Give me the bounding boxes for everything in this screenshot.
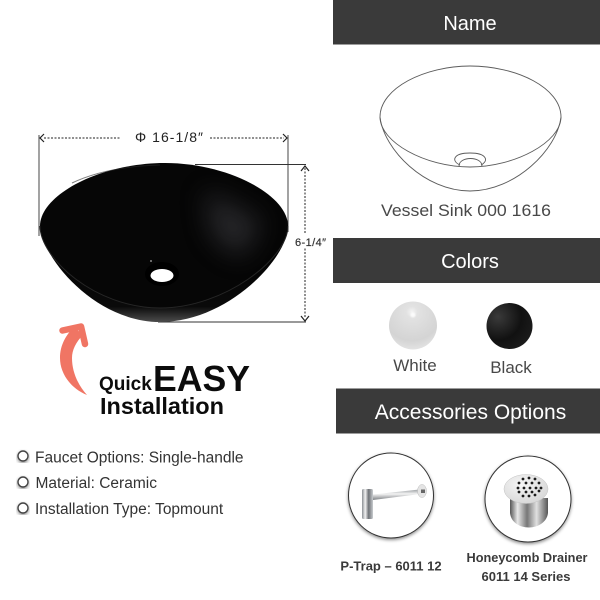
bullet: material: Material: Ceramic: [36, 475, 157, 492]
header bar: Accessories Options: [336, 388, 600, 434]
accessory: Honeycomb Drainer: Honeycomb Drainer: [466, 550, 588, 565]
bullet: faucet options: Faucet Options: Single-handle: [35, 450, 244, 466]
installation arrow: [60, 326, 87, 395]
accessory: Honeycomb Drainer: [466, 456, 588, 584]
dimension: height 6-1/4: 6-1/4″: [295, 237, 326, 249]
heading: Quick EASY Installation: [99, 358, 250, 419]
header bar: Colors: Colors: [441, 251, 499, 273]
dimension: width 16-1/8: [39, 129, 288, 236]
bullet: installation type: Installation Type: Topmount: [35, 501, 224, 518]
color swatch: black: Black: [490, 358, 532, 377]
color swatch: white: White: [393, 356, 437, 375]
heading: Quick EASY Installation: Quick: [99, 374, 152, 395]
heading: Quick EASY Installation: EASY: [153, 358, 250, 399]
dimension: height 6-1/4: [158, 164, 327, 322]
feature list: [18, 450, 244, 518]
header bar: Name: [333, 0, 600, 44]
header bar: Accessories Options: Accessories Options: [375, 401, 566, 424]
black vessel sink photo: [40, 163, 288, 322]
accessory: P-Trap: [340, 453, 442, 574]
accessory: Honeycomb Drainer: 6011 14 Series: [482, 569, 570, 584]
header bar: Colors: [333, 238, 600, 283]
sink name label: Vessel Sink 000 1616: [381, 201, 551, 220]
color swatch: black: [486, 303, 532, 377]
color swatch: white: [389, 302, 437, 375]
dimension: width 16-1/8: Φ 16-1/8″: [135, 129, 203, 145]
header bar: Name: Name: [443, 13, 497, 35]
heading: Quick EASY Installation: Installation: [100, 393, 224, 419]
sink line drawing: [380, 66, 561, 191]
accessory: P-Trap: P-Trap – 6011 12: [340, 558, 442, 574]
